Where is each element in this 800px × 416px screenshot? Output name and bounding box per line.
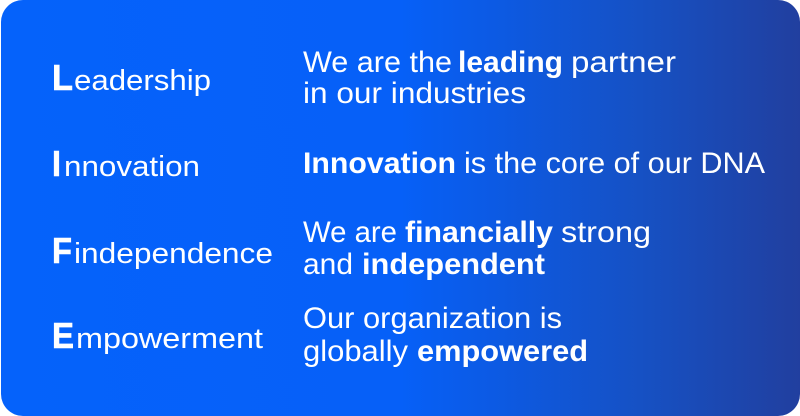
text: innovation statement: Innovation <box>303 147 456 180</box>
heading: Findependence: independence <box>74 238 273 270</box>
text: empowerment statement: Our organization is <box>303 302 562 335</box>
text: leading partner statement: leading <box>458 46 563 79</box>
heading: Innovation: nnovation <box>64 151 200 183</box>
row: Findependence <box>52 216 651 281</box>
heading: Leadership: L <box>52 57 73 98</box>
heading: Empowerment <box>52 315 263 356</box>
text: financial independence statement: We are <box>303 216 397 249</box>
text: empowerment statement: globally <box>303 335 408 368</box>
text: leading partner statement <box>303 46 676 110</box>
row: Innovation <box>52 143 765 184</box>
row: Empowerment <box>52 302 588 368</box>
heading: Empowerment: mpowerment <box>76 323 263 355</box>
row: Leadership <box>52 46 676 110</box>
text: innovation statement <box>303 147 765 180</box>
heading: Leadership: eadership <box>74 65 211 97</box>
text: financial independence statement: financially <box>405 216 553 249</box>
text: financial independence statement <box>303 216 651 281</box>
text: empowerment statement <box>303 302 588 368</box>
heading: Innovation: I <box>52 143 61 184</box>
text: financial independence statement: independent <box>362 248 545 281</box>
text: financial independence statement: and <box>303 248 353 281</box>
heading: Findependence <box>52 230 273 271</box>
text: financial independence statement: strong <box>561 216 651 249</box>
text: empowerment statement: empowered <box>417 335 588 368</box>
heading: Leadership <box>52 57 211 98</box>
heading: Empowerment: E <box>52 315 74 356</box>
text: innovation statement: is the core of our DNA <box>464 147 765 180</box>
text: leading partner statement: in our industries <box>303 77 526 110</box>
text: leading partner statement: We are the <box>303 46 452 79</box>
heading: Innovation <box>52 143 200 184</box>
heading: Findependence: F <box>52 230 72 271</box>
text: leading partner statement: partner <box>571 46 676 79</box>
